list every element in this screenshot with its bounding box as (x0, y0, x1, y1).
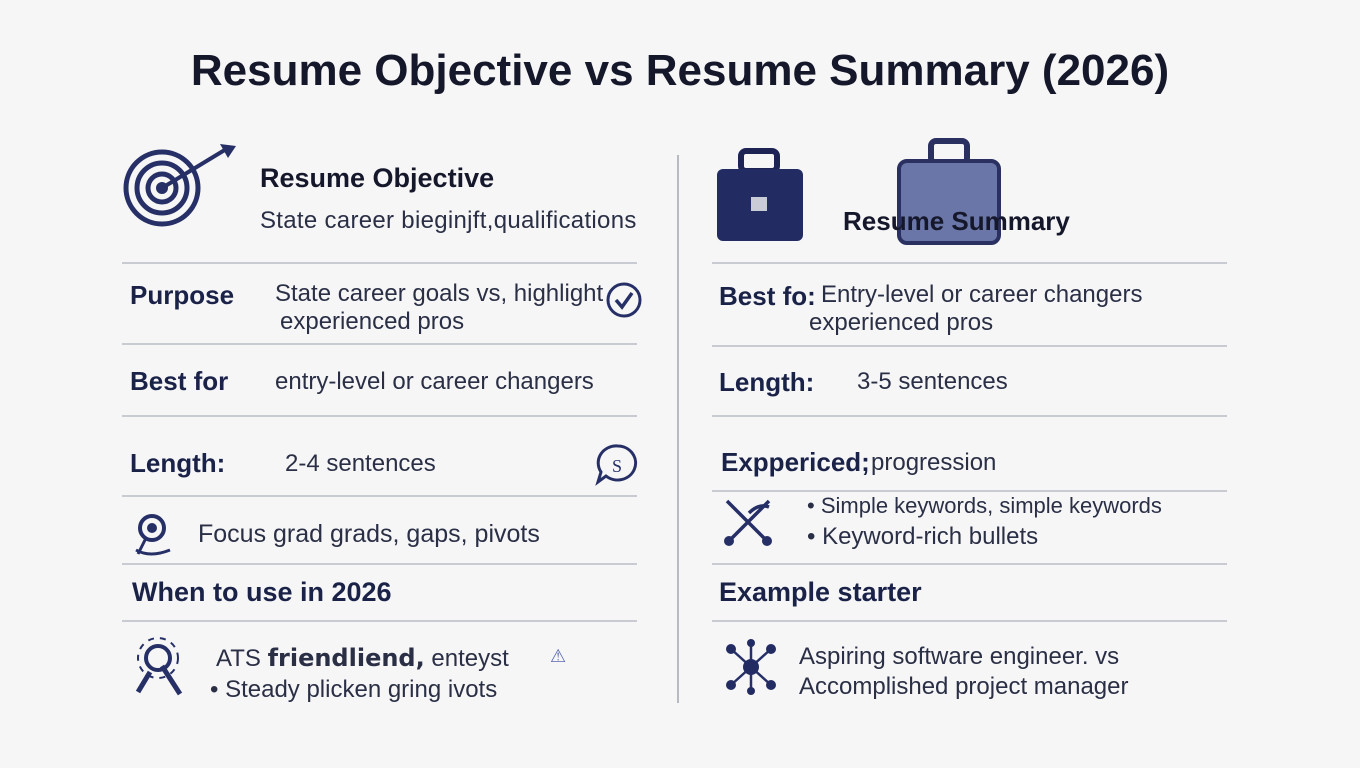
icon: target (124, 144, 236, 226)
row: examples: Accomplished project manager (799, 673, 1128, 700)
row: experienced progression: progression (871, 449, 996, 476)
row: purpose: experienced pros (280, 308, 464, 335)
heading: resume summary: Resume Summary (843, 206, 1070, 236)
row: keywords: • Simple keywords, simple keywords (807, 493, 1162, 518)
row: best for: Entry-level or career changers (821, 281, 1142, 308)
row: length (719, 367, 1008, 397)
icon: speech bubble (595, 444, 638, 486)
row: examples: Aspiring software engineer. vs (799, 643, 1119, 670)
row: best for: Best fo: (719, 281, 816, 311)
icon: speech bubble: S (612, 456, 622, 476)
row: focus (135, 514, 540, 556)
row: best for: Best for (130, 366, 228, 396)
panel: resume objective (124, 144, 642, 703)
row: best for: entry-level or career changers (275, 368, 594, 395)
row: length: 2-4 sentences (285, 450, 436, 477)
row: focus: Focus grad grads, gaps, pivots (198, 520, 540, 548)
row: best for (130, 366, 594, 396)
row: length: 3-5 sentences (857, 368, 1008, 395)
row: length (130, 444, 638, 486)
row: experienced progression (721, 447, 996, 477)
row: keywords (724, 493, 1162, 550)
vertical divider (677, 155, 679, 703)
row: ATS: ⚠ (550, 646, 566, 666)
row: examples (726, 639, 1128, 700)
title: Resume Objective vs Resume Summary (2026) (191, 46, 1169, 95)
row: best for (719, 281, 1142, 336)
row: length: Length: (719, 367, 814, 397)
row: keywords: • Keyword-rich bullets (807, 523, 1038, 550)
row: length: Length: (130, 448, 225, 478)
row: purpose: State career goals vs, highlight (275, 280, 603, 307)
row: best for: experienced pros (809, 309, 993, 336)
heading: resume objective: Resume Objective (260, 163, 494, 193)
row: purpose (130, 280, 642, 335)
panel: resume summary (717, 138, 1162, 700)
row: ATS: ATS friendliend, enteyst (216, 644, 509, 672)
row: ATS (136, 637, 566, 703)
icon: briefcase dark (717, 148, 803, 241)
row: purpose: Purpose (130, 280, 234, 310)
heading: example starter: Example starter (719, 577, 922, 607)
row: ATS: • Steady plicken gring ivots (210, 676, 497, 703)
row: experienced progression: Exppericed; (721, 447, 870, 477)
heading: when to use: When to use in 2026 (132, 577, 392, 607)
icon: check (606, 282, 642, 318)
icon: briefcase light (897, 138, 1001, 245)
subtitle: State career bieginjft,qualifications (260, 207, 637, 234)
